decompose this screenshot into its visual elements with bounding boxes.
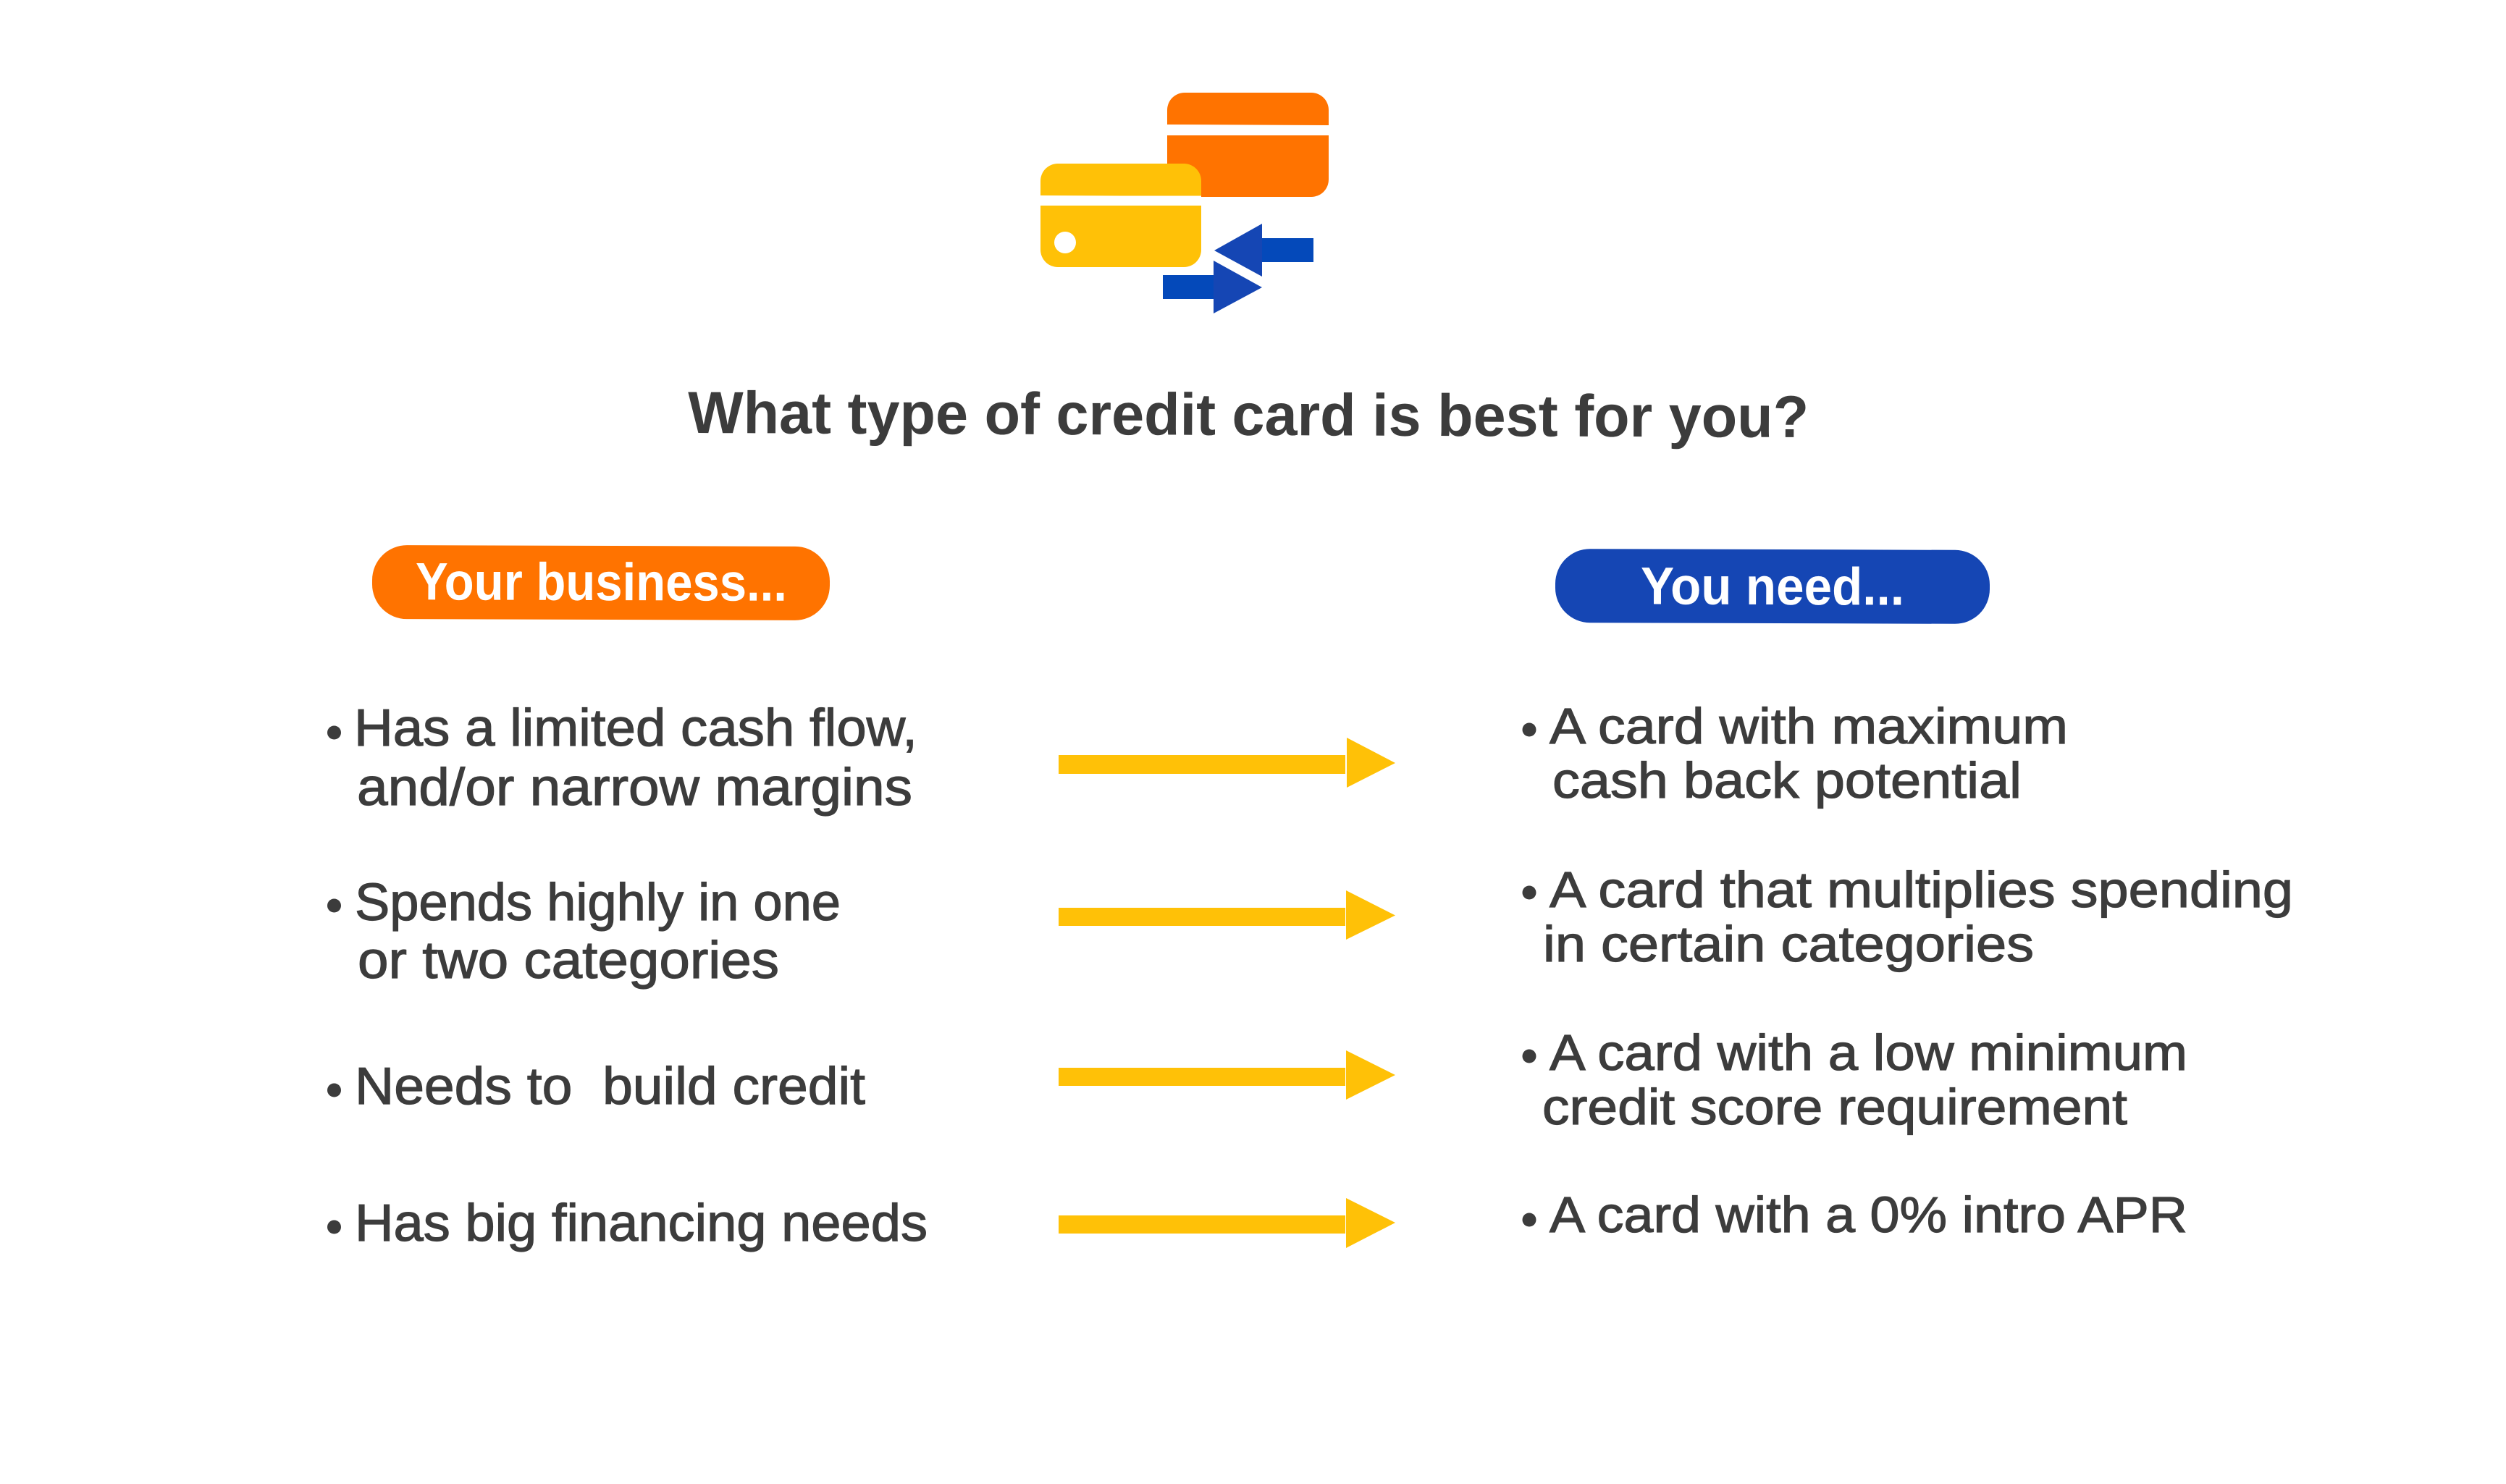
right item: maximum cash back	[1522, 698, 2068, 809]
right item: intro APR: A card with a 0% intro APR	[1550, 1186, 2187, 1243]
arrow 3	[1059, 1050, 1395, 1100]
icon: orange card	[1167, 93, 1329, 197]
left item: financing needs: Has big financing needs	[355, 1194, 928, 1252]
right item: multiplies spending: A card that multiplies spending	[1550, 861, 2293, 918]
arrow 1	[1059, 738, 1395, 788]
right item: low minimum score	[1522, 1024, 2187, 1135]
icon: credit cards with exchange arrows	[1040, 93, 1329, 313]
right item: maximum cash back: cash back potential	[1552, 752, 2022, 809]
left item: limited cash flow: Has a limited cash flow,	[354, 699, 917, 757]
pill heading: You need: You need...	[1641, 557, 1904, 617]
right item: multiplies spending	[1522, 861, 2293, 972]
left item: spends highly: or two categories	[358, 932, 779, 990]
right item: maximum cash back: A card with maximum	[1550, 698, 2068, 754]
left item: limited cash flow	[327, 699, 917, 817]
icon: blue arrow pointing right	[1163, 261, 1262, 313]
right item: low minimum score: credit score requirement	[1542, 1079, 2127, 1135]
left item: limited cash flow: and/or narrow margins	[357, 759, 912, 817]
title: What type of credit card is best for you?	[688, 380, 1809, 450]
left item: spends highly: Spends highly in one	[355, 874, 841, 932]
icon: yellow card	[1040, 164, 1201, 267]
right item: multiplies spending: in certain categories	[1543, 916, 2034, 972]
left item: build credit: Needs to build credit	[355, 1058, 865, 1116]
icon: blue arrow pointing left	[1214, 224, 1313, 277]
left item: spends highly	[327, 874, 841, 990]
right item: low minimum score: A card with a low minimum	[1550, 1024, 2187, 1081]
pill heading: You need	[1555, 549, 1990, 624]
arrow 2	[1059, 890, 1395, 940]
arrow 4	[1059, 1198, 1395, 1248]
pill heading: Your business: Your business...	[416, 552, 787, 612]
